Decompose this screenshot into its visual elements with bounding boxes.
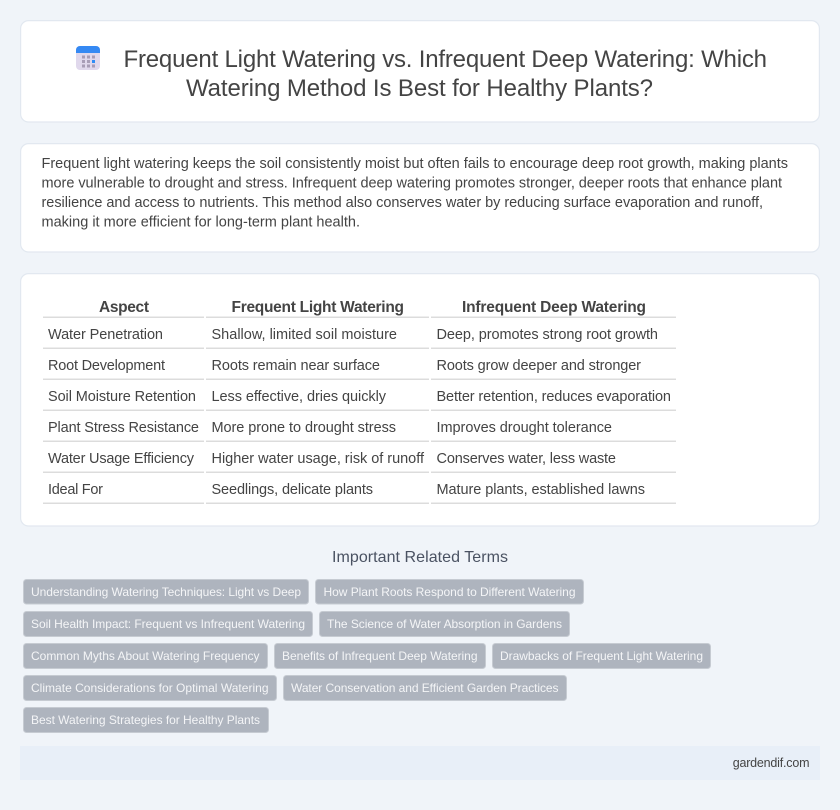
description text: making it more efficient for long-term plant health. (42, 214, 360, 230)
icon: calendar (76, 46, 100, 70)
row: root development: Root Development (48, 358, 165, 374)
tag (274, 644, 486, 668)
row: plant stress resistance: Improves drought tolerance (436, 420, 612, 436)
tag (24, 676, 276, 700)
tag: Benefits of Infrequent Deep Watering (282, 649, 478, 663)
tag: Drawbacks of Frequent Light Watering (500, 649, 703, 663)
row: water penetration (43, 327, 676, 349)
panel: header (21, 21, 819, 122)
tag: Soil Health Impact: Frequent vs Infrequent Watering (31, 617, 305, 631)
row: root development: Roots grow deeper and stronger (436, 358, 641, 374)
description text: more vulnerable to drought and stress. Infrequent deep watering promotes stronger, deeper roots that enhance plant (42, 176, 782, 192)
tag (24, 612, 312, 636)
footer bar (20, 746, 820, 780)
row: ideal for (43, 482, 676, 504)
row: plant stress resistance (43, 420, 676, 442)
row: ideal for: Mature plants, established lawns (436, 482, 645, 498)
row: soil moisture retention: Soil Moisture Retention (48, 389, 196, 405)
table header row: Aspect (99, 299, 149, 316)
heading: related terms: Important Related Terms (332, 549, 508, 566)
title: Watering Method Is Best for Healthy Plants? (186, 75, 653, 102)
tag (24, 708, 268, 732)
table header row (43, 299, 676, 318)
related terms tags (24, 580, 710, 732)
tag: How Plant Roots Respond to Different Watering (324, 585, 576, 599)
row: water penetration: Shallow, limited soil moisture (212, 327, 397, 343)
row: soil moisture retention: Better retention, reduces evaporation (436, 389, 671, 405)
tag: Water Conservation and Efficient Garden Practices (291, 681, 558, 695)
tag (316, 580, 584, 604)
row: root development (43, 358, 676, 380)
description text (42, 156, 788, 230)
row: water usage efficiency: Conserves water, less waste (436, 451, 616, 467)
tag: Climate Considerations for Optimal Watering (31, 681, 268, 695)
row: water usage efficiency: Higher water usage, risk of runoff (212, 451, 425, 467)
row: water penetration: Water Penetration (48, 327, 163, 343)
table header row: Infrequent Deep Watering (462, 299, 646, 316)
tag (320, 612, 570, 636)
title (124, 46, 767, 102)
tag (284, 676, 566, 700)
tag: The Science of Water Absorption in Gardens (327, 617, 562, 631)
row: water penetration: Deep, promotes strong root growth (436, 327, 658, 343)
row: water usage efficiency (43, 451, 676, 473)
tag: Common Myths About Watering Frequency (31, 649, 260, 663)
tag (24, 644, 268, 668)
row: water usage efficiency: Water Usage Efficiency (48, 451, 195, 467)
row: ideal for: Seedlings, delicate plants (212, 482, 373, 498)
row: plant stress resistance: More prone to drought stress (212, 420, 396, 436)
tag (492, 644, 710, 668)
row: root development: Roots remain near surface (212, 358, 380, 374)
tag: Understanding Watering Techniques: Light vs Deep (31, 585, 301, 599)
panel: comparison table (21, 274, 819, 526)
footer bar: gardendif.com (733, 756, 810, 770)
table header row: Frequent Light Watering (232, 299, 404, 316)
description text: Frequent light watering keeps the soil consistently moist but often fails to encourage deep root growth, making plants (42, 156, 788, 172)
panel: description (21, 144, 819, 252)
row: soil moisture retention (43, 389, 676, 411)
row: ideal for: Ideal For (48, 482, 103, 498)
description text: resilience and access to nutrients. This method also conserves water by reducing surface evaporation and runoff, (42, 195, 763, 211)
title: Frequent Light Watering vs. Infrequent Deep Watering: Which (124, 46, 767, 73)
row: soil moisture retention: Less effective, dries quickly (212, 389, 387, 405)
tag (24, 580, 308, 604)
tag: Best Watering Strategies for Healthy Plants (31, 713, 260, 727)
row: plant stress resistance: Plant Stress Resistance (48, 420, 199, 436)
